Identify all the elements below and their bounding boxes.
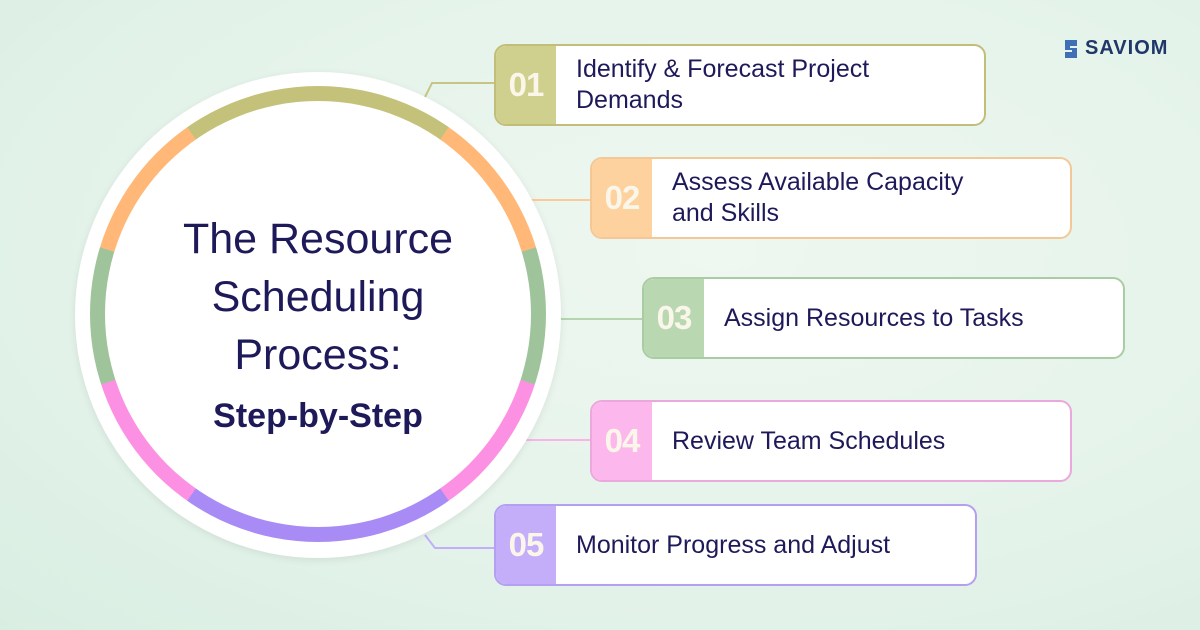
title: Step-by-Step (213, 397, 423, 435)
card 5: 05 (509, 526, 543, 563)
card 1 (494, 44, 986, 126)
card 3: 03 (657, 299, 691, 336)
card 1: Identify & Forecast Project (576, 55, 869, 83)
card 1: 01 (509, 66, 543, 103)
card 4: 04 (605, 422, 639, 459)
card 3 (642, 277, 1125, 359)
card 4 (590, 400, 1072, 482)
card 2: 02 (605, 179, 639, 216)
card 3: Assign Resources to Tasks (724, 304, 1024, 332)
title (183, 215, 453, 435)
title: Scheduling (212, 273, 424, 321)
card 4: Review Team Schedules (672, 426, 945, 454)
card 5 (494, 504, 977, 586)
logo: SAVIOM (1085, 37, 1168, 59)
card 2: Assess Available Capacity (672, 168, 963, 196)
title: The Resource (183, 215, 453, 263)
ring (90, 86, 546, 542)
card 1: Demands (576, 86, 683, 114)
card 5: Monitor Progress and Adjust (576, 530, 890, 558)
card 2: and Skills (672, 199, 779, 227)
circle (75, 72, 561, 558)
card 2 (590, 157, 1072, 239)
title: Process: (234, 331, 402, 379)
